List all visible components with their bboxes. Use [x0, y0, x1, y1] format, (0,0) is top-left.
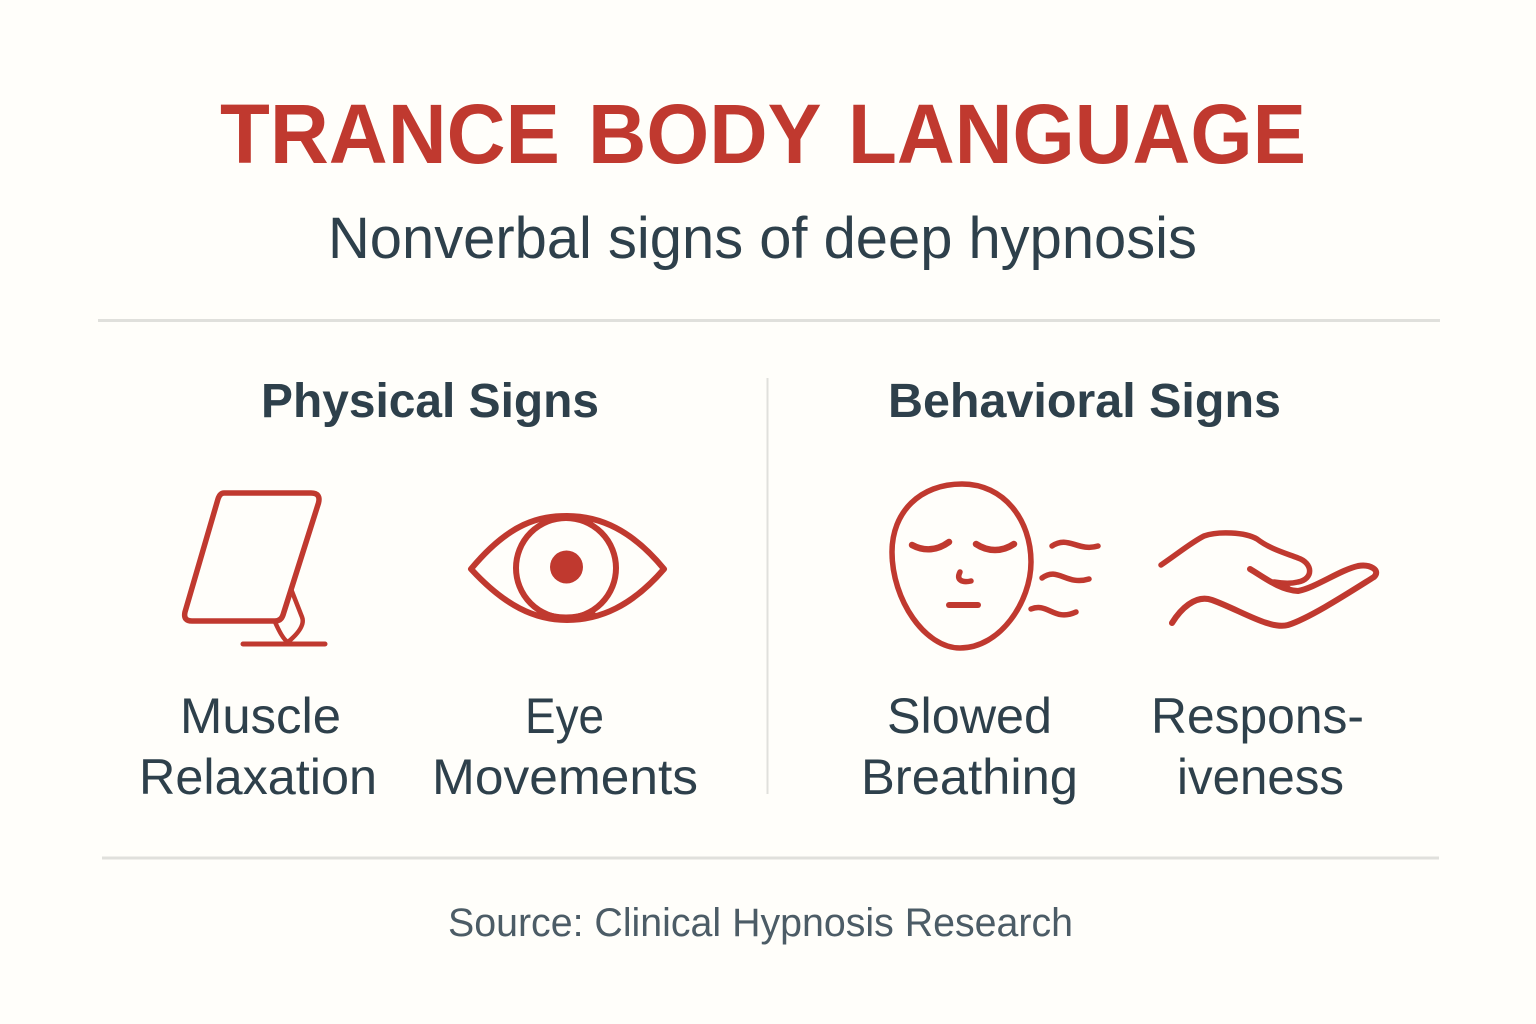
icon: muscle relaxation: [185, 493, 325, 644]
heading: physical signs: Physical Signs: [261, 375, 599, 428]
label: responsiveness: iveness: [1177, 749, 1344, 805]
icon: slowed breathing: [892, 484, 1098, 648]
label: slowed breathing: Breathing: [861, 749, 1078, 805]
label: eye movements: Movements: [432, 749, 698, 805]
source note: Source: Clinical Hypnosis Research: [448, 901, 1073, 945]
label: muscle relaxation: Relaxation: [139, 749, 377, 805]
label: slowed breathing: Slowed: [887, 688, 1052, 744]
label: muscle relaxation: Muscle: [180, 688, 341, 744]
icon: responsive hand: [1161, 533, 1376, 626]
title: LANGUAGE: [848, 87, 1306, 181]
label: responsiveness: Respons-: [1151, 688, 1364, 744]
icon: eye: [471, 514, 664, 620]
panel: behavioral signs: [861, 375, 1376, 805]
title: BODY: [588, 87, 820, 181]
subtitle: Nonverbal signs of deep hypnosis: [328, 206, 1197, 271]
title: TRANCE: [220, 87, 560, 181]
label: eye movements: Eye: [525, 688, 604, 744]
panel: physical signs: [139, 375, 698, 805]
heading: behavioral signs: Behavioral Signs: [888, 375, 1281, 428]
